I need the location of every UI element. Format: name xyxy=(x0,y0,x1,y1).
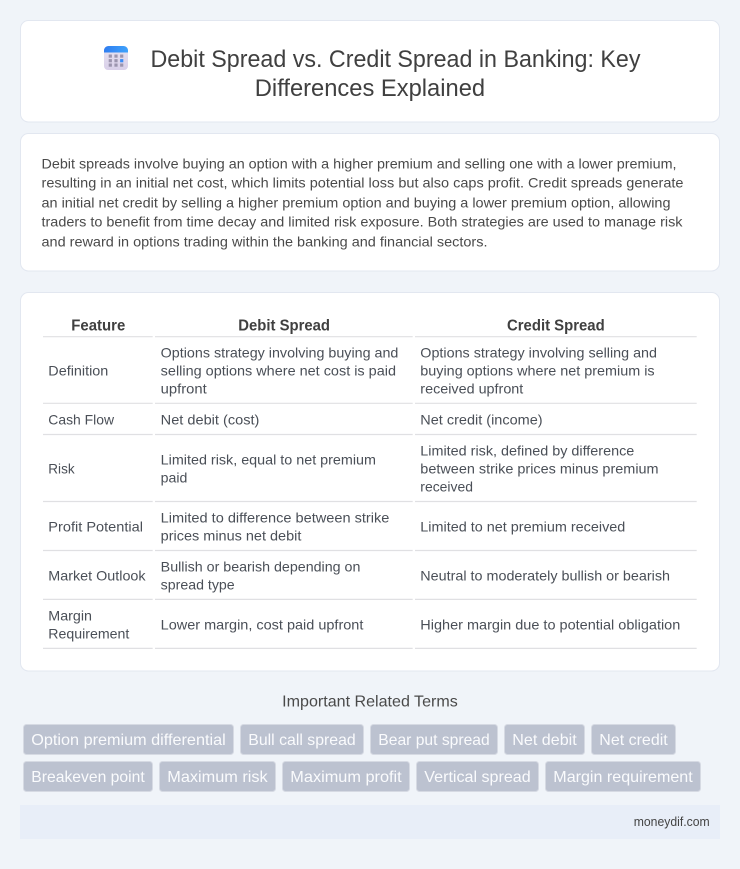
panel: header xyxy=(20,20,720,122)
table row: risk: received xyxy=(420,478,473,494)
table row: definition xyxy=(48,345,657,397)
table row: profit potential xyxy=(48,510,625,544)
panel: summary paragraph xyxy=(20,134,720,271)
table header row: Debit Spread xyxy=(238,318,330,335)
table row: margin requirement: Lower margin, cost paid upfront xyxy=(161,617,364,633)
table row: definition: buying options where net premium is xyxy=(420,363,655,379)
tag: vertical spread: Vertical spread xyxy=(424,769,531,786)
table row: risk: paid xyxy=(161,470,187,486)
table row: definition: received upfront xyxy=(420,381,523,397)
tags: related terms xyxy=(24,724,700,792)
table row: margin requirement: Requirement xyxy=(48,626,129,642)
table row: definition: Options strategy involving selling and xyxy=(420,345,657,361)
tag: vertical spread xyxy=(416,762,538,792)
table row: margin requirement xyxy=(48,608,680,642)
table row: market outlook: Bullish or bearish depending on xyxy=(161,559,360,575)
footer: moneydif.com xyxy=(634,814,710,829)
table header row: Feature xyxy=(71,318,125,335)
tag: margin requirement xyxy=(546,762,700,792)
tag: maximum profit xyxy=(282,762,410,792)
tag: bear put spread: Bear put spread xyxy=(378,732,490,749)
title xyxy=(150,46,641,102)
table row: cash flow: Cash Flow xyxy=(48,411,115,427)
tag: margin requirement: Margin requirement xyxy=(553,769,693,786)
icon: calendar xyxy=(104,46,128,70)
table row: market outlook: Neutral to moderately bullish or bearish xyxy=(420,568,670,584)
table row: profit potential: Limited to net premium received xyxy=(420,519,625,535)
panel: comparison table xyxy=(20,292,720,671)
table row: margin requirement: Margin xyxy=(48,608,92,624)
table row: risk: Limited risk, defined by difference xyxy=(420,442,635,458)
table row: profit potential: Limited to difference between strike xyxy=(161,510,390,526)
footer xyxy=(20,805,720,839)
tag: net credit: Net credit xyxy=(599,732,668,749)
text block: summary: resulting in an initial net cost, which limits potential loss but also caps profit. Credit spreads generate xyxy=(42,175,684,191)
table row: definition: upfront xyxy=(161,381,207,397)
table row: cash flow: Net debit (cost) xyxy=(161,411,259,427)
tag: option premium differential xyxy=(24,724,234,754)
table row: profit potential: prices minus net debit xyxy=(161,528,302,544)
table row: market outlook: spread type xyxy=(161,577,235,593)
tag: maximum risk: Maximum risk xyxy=(167,769,269,786)
title: Debit Spread vs. Credit Spread in Banking: Key xyxy=(150,46,641,73)
tag: bull call spread: Bull call spread xyxy=(248,732,356,749)
tag: option premium differential: Option premium differential xyxy=(31,732,226,749)
tag: bear put spread xyxy=(370,724,498,754)
text block: summary xyxy=(42,155,684,249)
text block: summary: and reward in options trading within the banking and financial sectors. xyxy=(42,233,488,249)
tag: net debit xyxy=(504,724,584,754)
table header row: Credit Spread xyxy=(507,318,605,335)
table row: market outlook xyxy=(48,559,670,593)
table row: margin requirement: Higher margin due to potential obligation xyxy=(420,617,680,633)
tag: net debit: Net debit xyxy=(512,732,577,749)
tag: breakeven point xyxy=(24,762,152,792)
text block: summary: traders to benefit from time decay and limited risk exposure. Both strategies are used to manage risk xyxy=(42,214,684,230)
tag: maximum profit: Maximum profit xyxy=(290,769,402,786)
tag: maximum risk xyxy=(160,762,276,792)
tag: net credit xyxy=(592,724,676,754)
table row: market outlook: Market Outlook xyxy=(48,568,147,584)
table row: cash flow: Net credit (income) xyxy=(420,411,543,427)
text block: summary: Debit spreads involve buying an option with a higher premium and selling one with a lower premium, xyxy=(42,155,676,171)
tag: breakeven point: Breakeven point xyxy=(31,769,145,786)
table row: definition: Definition xyxy=(48,363,108,379)
table row: risk: Limited risk, equal to net premium xyxy=(161,452,376,468)
heading: important related terms: Important Related Terms xyxy=(282,694,458,711)
text block: summary: an initial net credit by selling a higher premium option and buying a lower premium option, allowing xyxy=(42,194,670,210)
table row: risk: Risk xyxy=(48,460,76,476)
table row: definition: selling options where net cost is paid xyxy=(161,363,396,379)
table row: profit potential: Profit Potential xyxy=(48,519,143,535)
table header row xyxy=(71,318,605,335)
title: Differences Explained xyxy=(255,75,485,102)
table row: risk xyxy=(48,442,659,494)
tag: bull call spread xyxy=(240,724,364,754)
table row: risk: between strike prices minus premium xyxy=(420,460,659,476)
table row: cash flow xyxy=(48,411,543,427)
table row: definition: Options strategy involving buying and xyxy=(161,345,398,361)
